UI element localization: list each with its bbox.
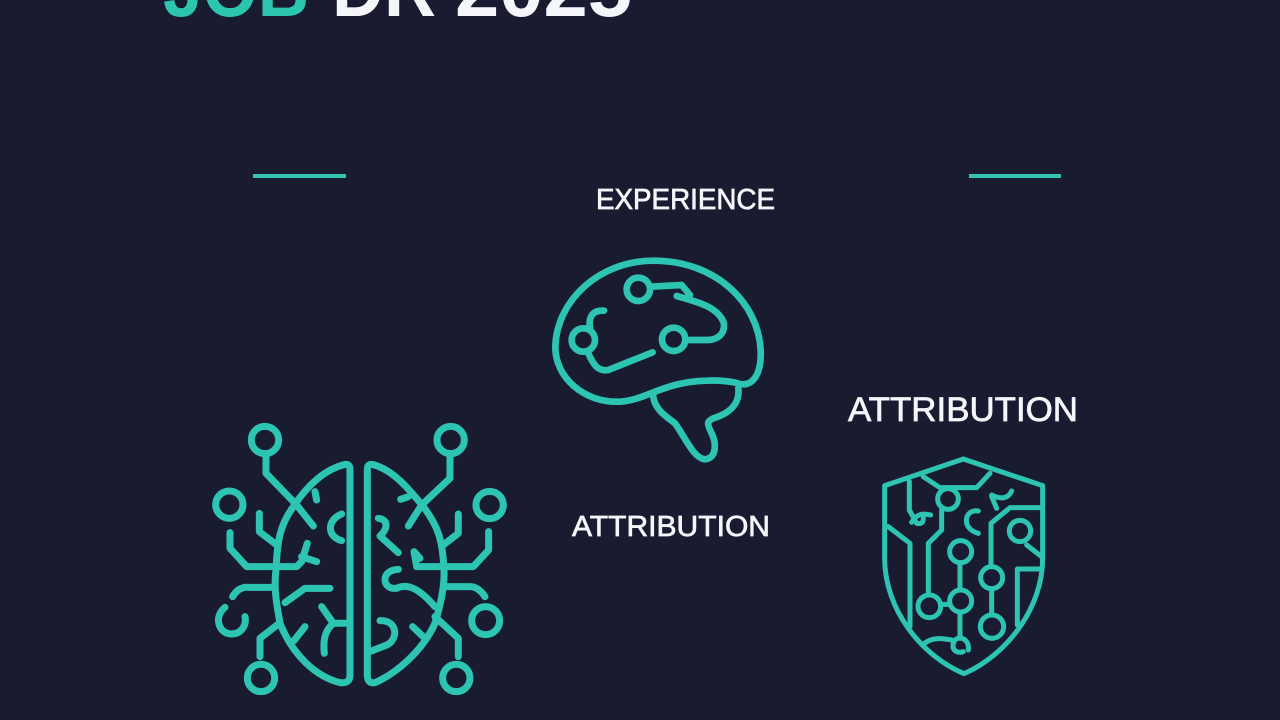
accent line: left: [253, 174, 346, 178]
title: [163, 0, 632, 33]
label: attribution right: ATTRIBUTION: [848, 391, 1078, 429]
icon: circuit shield: [885, 459, 1043, 674]
label: attribution center: ATTRIBUTION: [572, 511, 770, 543]
label: experience: EXPERIENCE: [596, 184, 775, 216]
icon: circuit brain left: [216, 426, 503, 692]
icon: center brain: [555, 261, 761, 459]
accent line: right: [969, 174, 1061, 178]
